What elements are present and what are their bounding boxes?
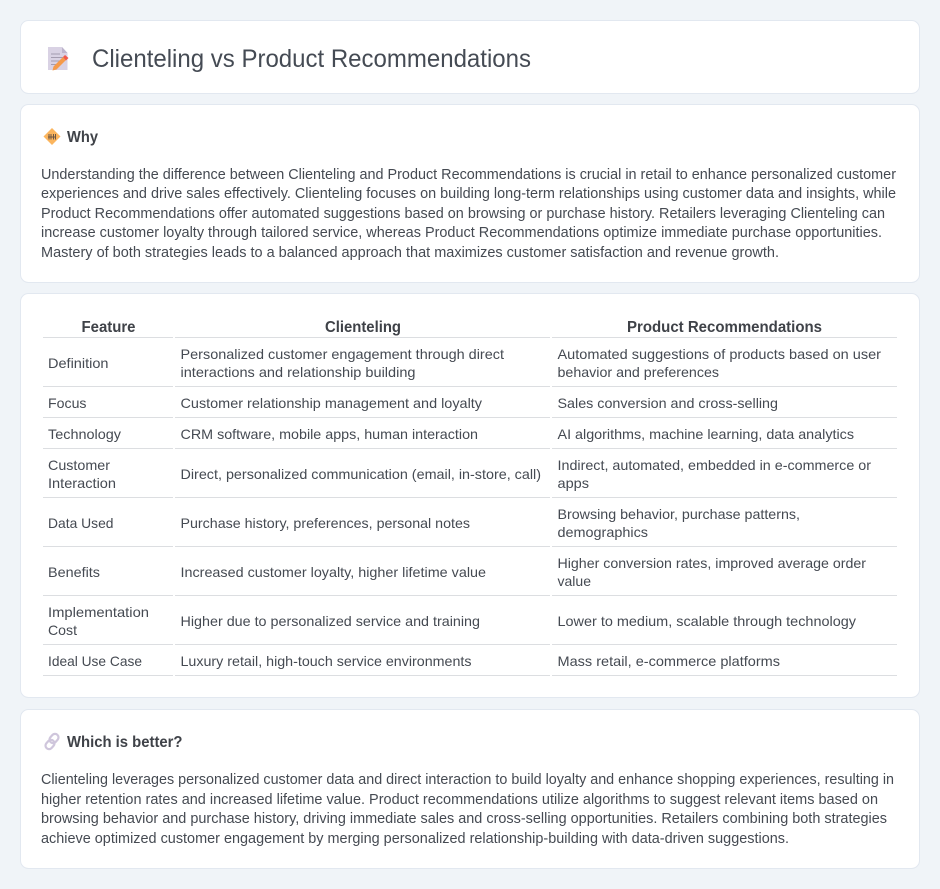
row: implementation cost: Cost — [48, 622, 77, 638]
row: implementation cost — [48, 604, 856, 638]
icon: orange diamond sign — [44, 128, 60, 145]
table header: Feature — [82, 319, 136, 336]
row: ideal use case: Luxury retail, high-touch service environments — [180, 653, 472, 669]
panel: comparison table — [20, 294, 920, 698]
text block: which is better paragraph — [41, 772, 894, 847]
text block: why paragraph — [41, 167, 896, 261]
icon: memo with pencil — [48, 47, 68, 70]
text block: why paragraph: Understanding the difference between Clienteling and Product Recommendations is crucial in retail to enhance personalized customer — [41, 167, 896, 183]
row: benefits: Benefits — [48, 564, 100, 580]
row: definition: Definition — [48, 355, 108, 371]
row: benefits: value — [558, 573, 591, 589]
row: data used: Browsing behavior, purchase patterns, — [558, 506, 800, 522]
text block: which is better paragraph: browsing behavior and purchase history, driving immediate sales and cross-selling opportunities. Retailers combining both strategies — [41, 811, 887, 827]
text block: which is better paragraph: higher retention rates and increased lifetime value. Product recommendations utilize algorithms to suggest relevant items based on — [41, 792, 878, 808]
row: technology: Technology — [48, 426, 121, 442]
table header: Product Recommendations — [627, 319, 822, 336]
text block: why paragraph: Product Recommendations offer automated suggestions based on browsing or purchase history. Retailers leveraging Clienteling can — [41, 206, 885, 222]
row: customer interaction: Direct, personalized communication (email, in-store, call) — [180, 466, 541, 482]
panel: title header — [20, 20, 920, 94]
row: data used: demographics — [558, 524, 648, 540]
row: focus: Sales conversion and cross-selling — [558, 395, 778, 411]
row: data used: Purchase history, preferences, personal notes — [180, 515, 470, 531]
table header — [82, 319, 822, 336]
row: implementation cost: Implementation — [48, 604, 149, 620]
row: definition: interactions and relationship building — [180, 364, 416, 380]
row: customer interaction: Customer — [48, 457, 110, 473]
row: definition: behavior and preferences — [558, 364, 719, 380]
row: benefits: Higher conversion rates, improved average order — [558, 555, 866, 571]
row: definition: Automated suggestions of products based on user — [558, 346, 881, 362]
table header: Clienteling — [325, 319, 401, 336]
row: definition: Personalized customer engagement through direct — [180, 346, 504, 362]
panel: why — [20, 104, 920, 282]
row: benefits — [48, 555, 866, 589]
row: focus: Focus — [48, 395, 86, 411]
text block: which is better paragraph: achieve optimized customer engagement by merging personalized relationship-building with data-driven suggestions. — [41, 831, 789, 847]
row: ideal use case: Mass retail, e-commerce platforms — [558, 653, 780, 669]
row: ideal use case — [48, 653, 780, 669]
row: ideal use case: Ideal Use Case — [48, 653, 142, 669]
row: focus — [48, 395, 778, 411]
row: technology: CRM software, mobile apps, human interaction — [180, 426, 478, 442]
row: technology: AI algorithms, machine learning, data analytics — [558, 426, 854, 442]
row: customer interaction: Interaction — [48, 475, 116, 491]
row: customer interaction: apps — [558, 475, 589, 491]
panel: which is better — [20, 710, 920, 868]
text block: which is better paragraph: Clienteling leverages personalized customer data and direct interaction to build loyalty and enhance shopping experiences, resulting in — [41, 772, 894, 788]
icon: chain link — [44, 732, 60, 751]
row: data used — [48, 506, 800, 540]
row: technology — [48, 426, 854, 442]
row: benefits: Increased customer loyalty, higher lifetime value — [180, 564, 486, 580]
heading: which is better: Which is better? — [67, 734, 182, 751]
text block: why paragraph: experiences and drive sales effectively. Clienteling focuses on building long-term relationships using customer data and insights, while — [41, 186, 896, 202]
heading: why: Why — [67, 129, 98, 146]
row: implementation cost: Lower to medium, scalable through technology — [558, 613, 856, 629]
title: Clienteling vs Product Recommendations — [92, 45, 531, 73]
row: focus: Customer relationship management and loyalty — [180, 395, 482, 411]
row: customer interaction: Indirect, automated, embedded in e-commerce or — [558, 457, 871, 473]
row: definition — [48, 346, 881, 380]
text block: why paragraph: Mastery of both strategies leads to a balanced approach that maximizes customer satisfaction and revenue growth. — [41, 245, 779, 261]
row: data used: Data Used — [48, 515, 114, 531]
text block: why paragraph: increase customer loyalty through tailored service, whereas Product Recommendations optimize immediate purchase opportunities. — [41, 225, 882, 241]
row: implementation cost: Higher due to personalized service and training — [180, 613, 480, 629]
row: customer interaction — [48, 457, 871, 491]
